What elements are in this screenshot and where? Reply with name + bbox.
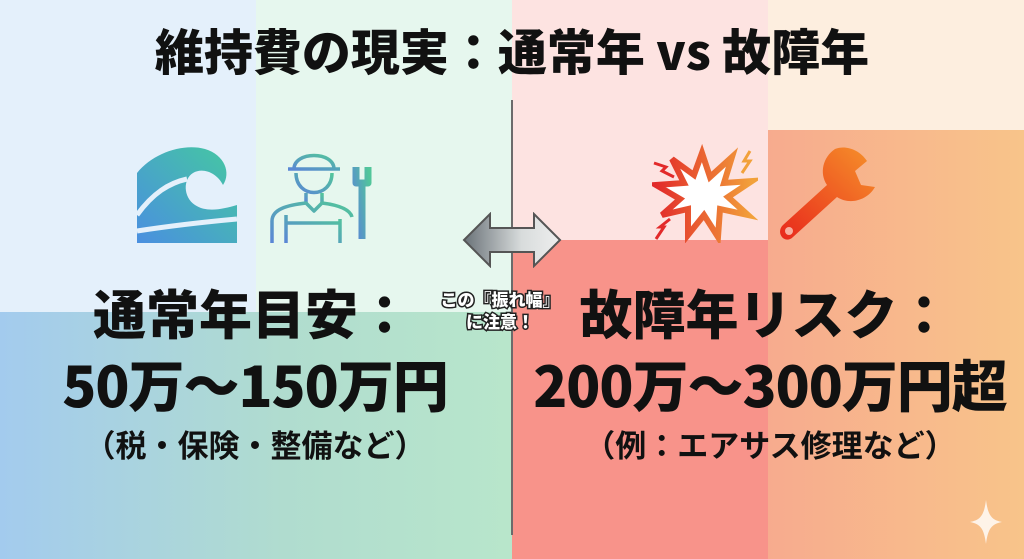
- amount: normal year: 50万～150万円: [62, 343, 448, 424]
- arrow: double headed: [462, 212, 562, 268]
- note: normal year: （税・保険・整備など）: [84, 421, 426, 466]
- heading: breakdown year: 故障年リスク：: [580, 274, 950, 350]
- background: top left mint: [256, 0, 512, 312]
- background: salmon block: [512, 240, 768, 559]
- background: top left blue: [0, 0, 256, 312]
- icon: explosion: [652, 144, 758, 243]
- heading: normal year: 通常年目安：: [93, 274, 411, 350]
- callout: fluctuation note: この『振れ幅』: [440, 286, 560, 311]
- background: bottom left gradient: [0, 312, 512, 559]
- icon: wave: [137, 147, 237, 243]
- icon: mechanic: [270, 154, 372, 243]
- icon: sparkle: [970, 500, 1002, 544]
- icon: wrench: [780, 148, 875, 240]
- background: top right pink: [512, 0, 768, 240]
- amount: breakdown year: 200万～300万円超: [533, 343, 1007, 424]
- callout: fluctuation note: [440, 286, 560, 333]
- note: breakdown year: （例：エアサス修理など）: [584, 421, 956, 466]
- divider line: [511, 100, 513, 535]
- title: 維持費の現実：通常年 vs 故障年: [155, 14, 869, 85]
- background: top right cream: [768, 0, 1024, 130]
- background: peach block: [768, 130, 1024, 559]
- callout: fluctuation note: に注意！: [466, 308, 534, 333]
